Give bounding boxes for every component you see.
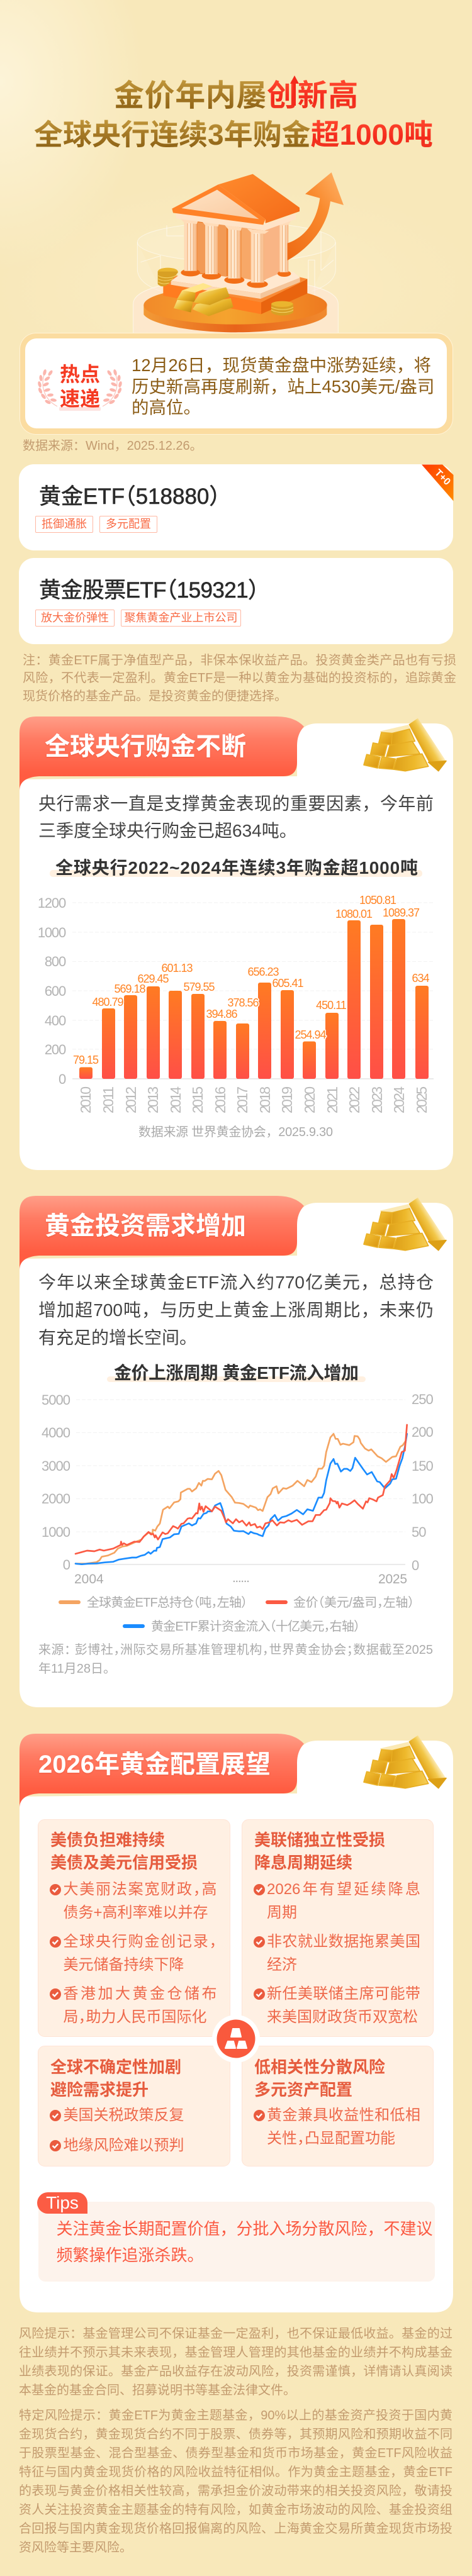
icon: gold bars: [363, 718, 447, 771]
heading: global uncertainty: [50, 2058, 181, 2099]
badge: hot news with laurels: 热点: [60, 363, 100, 386]
icon: center gold badge: [212, 2016, 260, 2062]
chart source note: 来源： 彭博社，洲际交易所基准管理机构，世界黄金协会；数据截至2025: [38, 1643, 433, 1657]
chart source note: 年11月28日。: [38, 1662, 110, 1676]
section 1 body text: [38, 794, 434, 840]
line chart: ETF holdings and gold price: 50: [412, 1524, 426, 1540]
bar chart: central bank gold purchases: 1000: [38, 925, 66, 940]
bar chart: central bank gold purchases: 数据来源 世界黄金协会，2025.9.30: [138, 1125, 333, 1139]
bullet: [254, 1933, 420, 1973]
callout text: 12月26日，现货黄金盘中涨势延续，将: [132, 355, 431, 375]
tips tag: Tips: [46, 2193, 79, 2212]
heading: Fed independence: 美联储独立性受损: [254, 1831, 385, 1849]
tips tag: [37, 2192, 87, 2214]
heading: US debt: 美债负担难持续: [50, 1831, 165, 1849]
illustration: bank on gold podium: [133, 172, 344, 333]
risk notice 2: 资人关注投资黄金主题基金的特有风险，如黄金市场波动的风险、基金投资组: [19, 2503, 452, 2517]
bullet: 债务+高利率难以并存: [63, 1904, 208, 1921]
icon: gold bars: [363, 1735, 447, 1789]
tips text: [57, 2219, 433, 2265]
panel: tips: [38, 2202, 435, 2282]
bullet: [254, 1985, 420, 2026]
risk notice 1: 风险提示：基金管理公司不保证基金一定盈利，也不保证最低收益。基金的过: [19, 2327, 452, 2341]
bar chart: central bank gold purchases: 579.55: [183, 981, 215, 993]
bullet: 地缘风险难以预判: [63, 2137, 184, 2154]
bullet: 局，助力人民币国际化: [63, 2008, 206, 2026]
line chart: ETF holdings and gold price: 1000: [42, 1524, 70, 1540]
line chart: ETF holdings and gold price: 3000: [42, 1458, 70, 1474]
callout text: 的高位。: [132, 398, 201, 417]
heading: section 1: 全球央行购金不断: [45, 733, 246, 761]
ribbon: T+0: T+0: [432, 467, 452, 488]
risk notice 2: 合回报与国内黄金现货价格回报偏离的风险、上海黄金交易所黄金现货市场投: [19, 2522, 452, 2536]
bar chart: central bank gold purchases: 79.15: [73, 1054, 99, 1066]
tag: [121, 610, 241, 627]
risk notice 2: [19, 2409, 452, 2555]
section 2 body text: [38, 1273, 434, 1347]
heading: low correlation: 低相关性分散风险: [254, 2058, 385, 2077]
bar chart: central bank gold purchases: 2014: [167, 1086, 184, 1113]
bar chart: central bank gold purchases: 254.94: [295, 1029, 327, 1041]
bar chart: central bank gold purchases: 全球央行2022~2024年连续3年购金超1000吨: [55, 858, 418, 878]
card title: gold ETF: 黄金ETF（518880）: [39, 484, 220, 509]
bar chart: central bank gold purchases: 601.13: [161, 962, 193, 974]
risk notice 1: 往业绩并不预示其未来表现，基金管理人管理的其他基金的业绩并不构成基金: [19, 2346, 452, 2360]
bullet: [50, 1985, 216, 2026]
line chart: ETF holdings and gold price: 2000: [42, 1491, 70, 1507]
bullet: [50, 1933, 216, 1973]
bullet: 来美国财政货币双宽松: [267, 2008, 418, 2026]
bar chart: central bank gold purchases: 800: [45, 954, 66, 969]
heading: US debt: 美债及美元信用受损: [50, 1853, 198, 1872]
risk notice 2: 资风险等主要风险。: [19, 2541, 132, 2555]
bar chart: central bank gold purchases: 2023: [369, 1086, 385, 1113]
panel: section 2 background: [20, 1196, 453, 1707]
bar chart: central bank gold purchases: 2024: [391, 1086, 407, 1113]
card: gold stock ETF: [19, 558, 453, 644]
heading: section 2: 黄金投资需求增加: [45, 1212, 246, 1240]
bullet: 周期: [267, 1904, 297, 1921]
bar chart: central bank gold purchases: 480.79: [92, 996, 124, 1008]
heading: global uncertainty: 全球不确定性加剧: [50, 2058, 181, 2077]
bar chart: central bank gold purchases: 605.41: [272, 977, 304, 990]
hero background glow: [0, 0, 472, 340]
heading: Fed independence: 降息周期延续: [254, 1853, 352, 1872]
bar chart: central bank gold purchases: 2018: [257, 1086, 273, 1113]
data source: 数据来源：Wind，2025.12.26。: [23, 439, 203, 453]
panel: Fed independence: [242, 1819, 434, 2037]
panel: US debt: [38, 1819, 230, 2037]
bullet: [254, 2107, 420, 2146]
callout text: [132, 355, 434, 417]
heading: low correlation: [254, 2058, 385, 2099]
tag: 多元配置: [106, 518, 151, 530]
section 1 body text: 央行需求一直是支撑黄金表现的重要因素，今年前: [38, 794, 434, 813]
bar chart: central bank gold purchases: 2021: [324, 1086, 340, 1113]
line chart: ETF holdings and gold price: 4000: [42, 1425, 70, 1441]
section 2 body text: 增加超700吨，与历史上黄金上涨周期比，未来仍: [38, 1300, 434, 1320]
section 1 body text: 三季度全球央行购金已超634吨。: [38, 821, 297, 840]
bar chart: central bank gold purchases: 1050.81: [359, 894, 396, 906]
risk notice 2: 特定风险提示：黄金ETF为黄金主题基金，90%以上的基金资产投资于国内黄: [19, 2409, 452, 2423]
badge: hot news with laurels: 速递: [60, 388, 100, 410]
bullet: 全球央行购金创记录，: [63, 1933, 216, 1950]
line chart: ETF holdings and gold price: 2004: [74, 1572, 104, 1586]
bar chart: central bank gold purchases: 2010: [77, 1086, 94, 1113]
risk notice 2: 于股票型基金、混合型基金、债券型基金和货币市场基金，黄金ETF风险收益: [19, 2446, 452, 2460]
tag: 抵御通胀: [42, 518, 87, 530]
section 2 body text: 有充足的增长空间。: [38, 1328, 197, 1347]
bar chart: central bank gold purchases: 2019: [279, 1086, 295, 1113]
bar chart: central bank gold purchases: [38, 858, 434, 1139]
bullet: [50, 1881, 216, 1921]
bullet: 经济: [267, 1956, 297, 1973]
bullet: 美国关税政策反复: [63, 2107, 184, 2124]
bar chart: central bank gold purchases: 1200: [38, 895, 66, 911]
line chart: ETF holdings and gold price: 0: [412, 1558, 419, 1573]
bar chart: central bank gold purchases: 2016: [212, 1086, 228, 1113]
risk notice 1: 本基金的基金合同、招募说明书等基金法律文件。: [19, 2384, 296, 2397]
panel: global uncertainty: [38, 2046, 230, 2166]
bar chart: central bank gold purchases: 1089.37: [383, 906, 420, 919]
tag: [35, 516, 93, 533]
bar chart: central bank gold purchases: 2017: [234, 1086, 250, 1113]
icon: red up arrow on title: [290, 75, 299, 106]
risk notice 2: 特征与国内黄金现货价格的风险收益特征相似。作为黄金主题基金，黄金ETF: [19, 2465, 452, 2479]
bar chart: central bank gold purchases: 2013: [145, 1086, 161, 1113]
risk notice 1: [19, 2327, 452, 2397]
line chart: ETF holdings and gold price: 金价（美元/盎司，左轴）: [293, 1595, 414, 1610]
bullet: 香港加大黄金仓储布: [63, 1985, 216, 2002]
line chart: ETF holdings and gold price: 金价上涨周期 黄金ETF流入增加: [114, 1363, 359, 1383]
heading: section 3: 2026年黄金配置展望: [38, 1751, 271, 1778]
bar chart: central bank gold purchases: 0: [59, 1071, 66, 1087]
bar chart: central bank gold purchases: 378.56: [227, 996, 259, 1009]
card: gold ETF: [19, 464, 453, 550]
bar chart: central bank gold purchases: 569.18: [114, 983, 146, 995]
panel: section 3 background: [20, 1734, 453, 2312]
tag: [99, 516, 157, 533]
note: 现货价格的基金产品。是投资黄金的便捷选择。: [23, 689, 287, 703]
line chart: ETF holdings and gold price: 5000: [42, 1392, 70, 1408]
heading: low correlation: 多元资产配置: [254, 2080, 352, 2099]
bullet: [254, 1881, 420, 1921]
tips text: 频繁操作追涨杀跌。: [57, 2246, 204, 2265]
panel: section 1 background: [20, 716, 453, 1170]
line chart: ETF holdings and gold price: 黄金ETF累计资金流入（十亿美元，右轴）: [151, 1619, 360, 1634]
bullet: 新任美联储主席可能带: [267, 1985, 420, 2002]
bar chart: central bank gold purchases: 600: [45, 983, 66, 999]
panel: low correlation: [242, 2046, 434, 2166]
line chart: ETF holdings and gold price: ......: [232, 1571, 250, 1585]
bar chart: central bank gold purchases: 450.11: [316, 999, 347, 1012]
note: 注：黄金ETF属于净值型产品，非保本保收益产品。投资黄金类产品也有亏损: [23, 654, 456, 667]
risk notice 2: 的表现与黄金价格相关性较高，需承担金价波动带来的相关投资风险，敬请投: [19, 2484, 452, 2498]
callout text: 历史新高再度刷新，站上4530美元/盎司: [132, 376, 434, 396]
bullet: 关性，凸显配置功能: [267, 2130, 395, 2146]
heading: US debt: [50, 1831, 198, 1872]
bar chart: central bank gold purchases: 2012: [123, 1086, 139, 1113]
risk notice 1: 业绩表现的保证。基金产品收益存在波动风险，投资需谨慎，详情请认真阅读: [19, 2365, 452, 2378]
bar chart: central bank gold purchases: 2020: [301, 1086, 318, 1113]
note: [23, 654, 456, 703]
tips text: 关注黄金长期配置价值，分批入场分散风险，不建议: [57, 2219, 433, 2238]
bullet: 美元储备持续下降: [63, 1956, 184, 1973]
tag: 聚焦黄金产业上市公司: [125, 611, 238, 624]
tag: [35, 610, 115, 627]
ribbon: T+0: [422, 464, 453, 501]
bar chart: central bank gold purchases: 400: [45, 1013, 66, 1029]
bar chart: central bank gold purchases: 2022: [346, 1086, 362, 1113]
card title: gold stock ETF: 黄金股票ETF（159321）: [39, 578, 259, 603]
bar chart: central bank gold purchases: 634: [412, 972, 429, 984]
bullet: 2026年有望延续降息: [267, 1881, 420, 1898]
bar chart: central bank gold purchases: 394.86: [206, 1008, 238, 1020]
bullet: 大美丽法案宽财政，高: [63, 1881, 216, 1898]
line chart: ETF holdings and gold price: 100: [412, 1491, 433, 1507]
icon: gold bars: [363, 1198, 447, 1251]
callout: hot news: [20, 333, 453, 435]
line chart: ETF holdings and gold price: 0: [63, 1557, 70, 1573]
badge: hot news with laurels: [38, 363, 122, 411]
bullet: 非农就业数据拖累美国: [267, 1933, 420, 1950]
bar chart: central bank gold purchases: 1080.01: [335, 908, 373, 920]
risk notice 2: 金现货合约，黄金现货合约不同于股票、债券等，其预期风险和预期收益不同: [19, 2428, 452, 2441]
bar chart: central bank gold purchases: 2015: [189, 1086, 206, 1113]
bar chart: central bank gold purchases: 629.45: [137, 973, 169, 985]
heading: Fed independence: [254, 1831, 385, 1872]
line chart: ETF holdings and gold price: 2025: [378, 1572, 407, 1586]
line chart: ETF holdings and gold price: 250: [412, 1391, 433, 1407]
title line 2: 全球央行连续3年购金超1000吨: [34, 118, 433, 151]
note: 风险，不代表一定盈利。黄金ETF是一种以黄金为基础的投资标的，追踪黄金: [23, 671, 456, 685]
bar chart: central bank gold purchases: 200: [45, 1042, 66, 1057]
line chart: ETF holdings and gold price: 150: [412, 1458, 433, 1474]
bar chart: central bank gold purchases: 2025: [413, 1086, 430, 1113]
line chart: ETF holdings and gold price: [42, 1363, 433, 1634]
line chart: ETF holdings and gold price: 200: [412, 1424, 433, 1440]
chart source note: [38, 1643, 433, 1676]
line chart: ETF holdings and gold price: 全球黄金ETF总持仓（吨，左轴）: [87, 1595, 247, 1610]
title line 1: 金价年内屡创新高: [114, 79, 359, 113]
bullet: 黄金兼具收益性和低相: [267, 2107, 420, 2124]
heading: global uncertainty: 避险需求提升: [50, 2080, 149, 2099]
tag: 放大金价弹性: [41, 611, 109, 624]
section 2 body text: 今年以来全球黄金ETF流入约770亿美元，总持仓: [38, 1273, 434, 1292]
bar chart: central bank gold purchases: 2011: [100, 1086, 116, 1113]
bar chart: central bank gold purchases: 656.23: [247, 966, 279, 978]
callout inner panel: [25, 338, 447, 428]
